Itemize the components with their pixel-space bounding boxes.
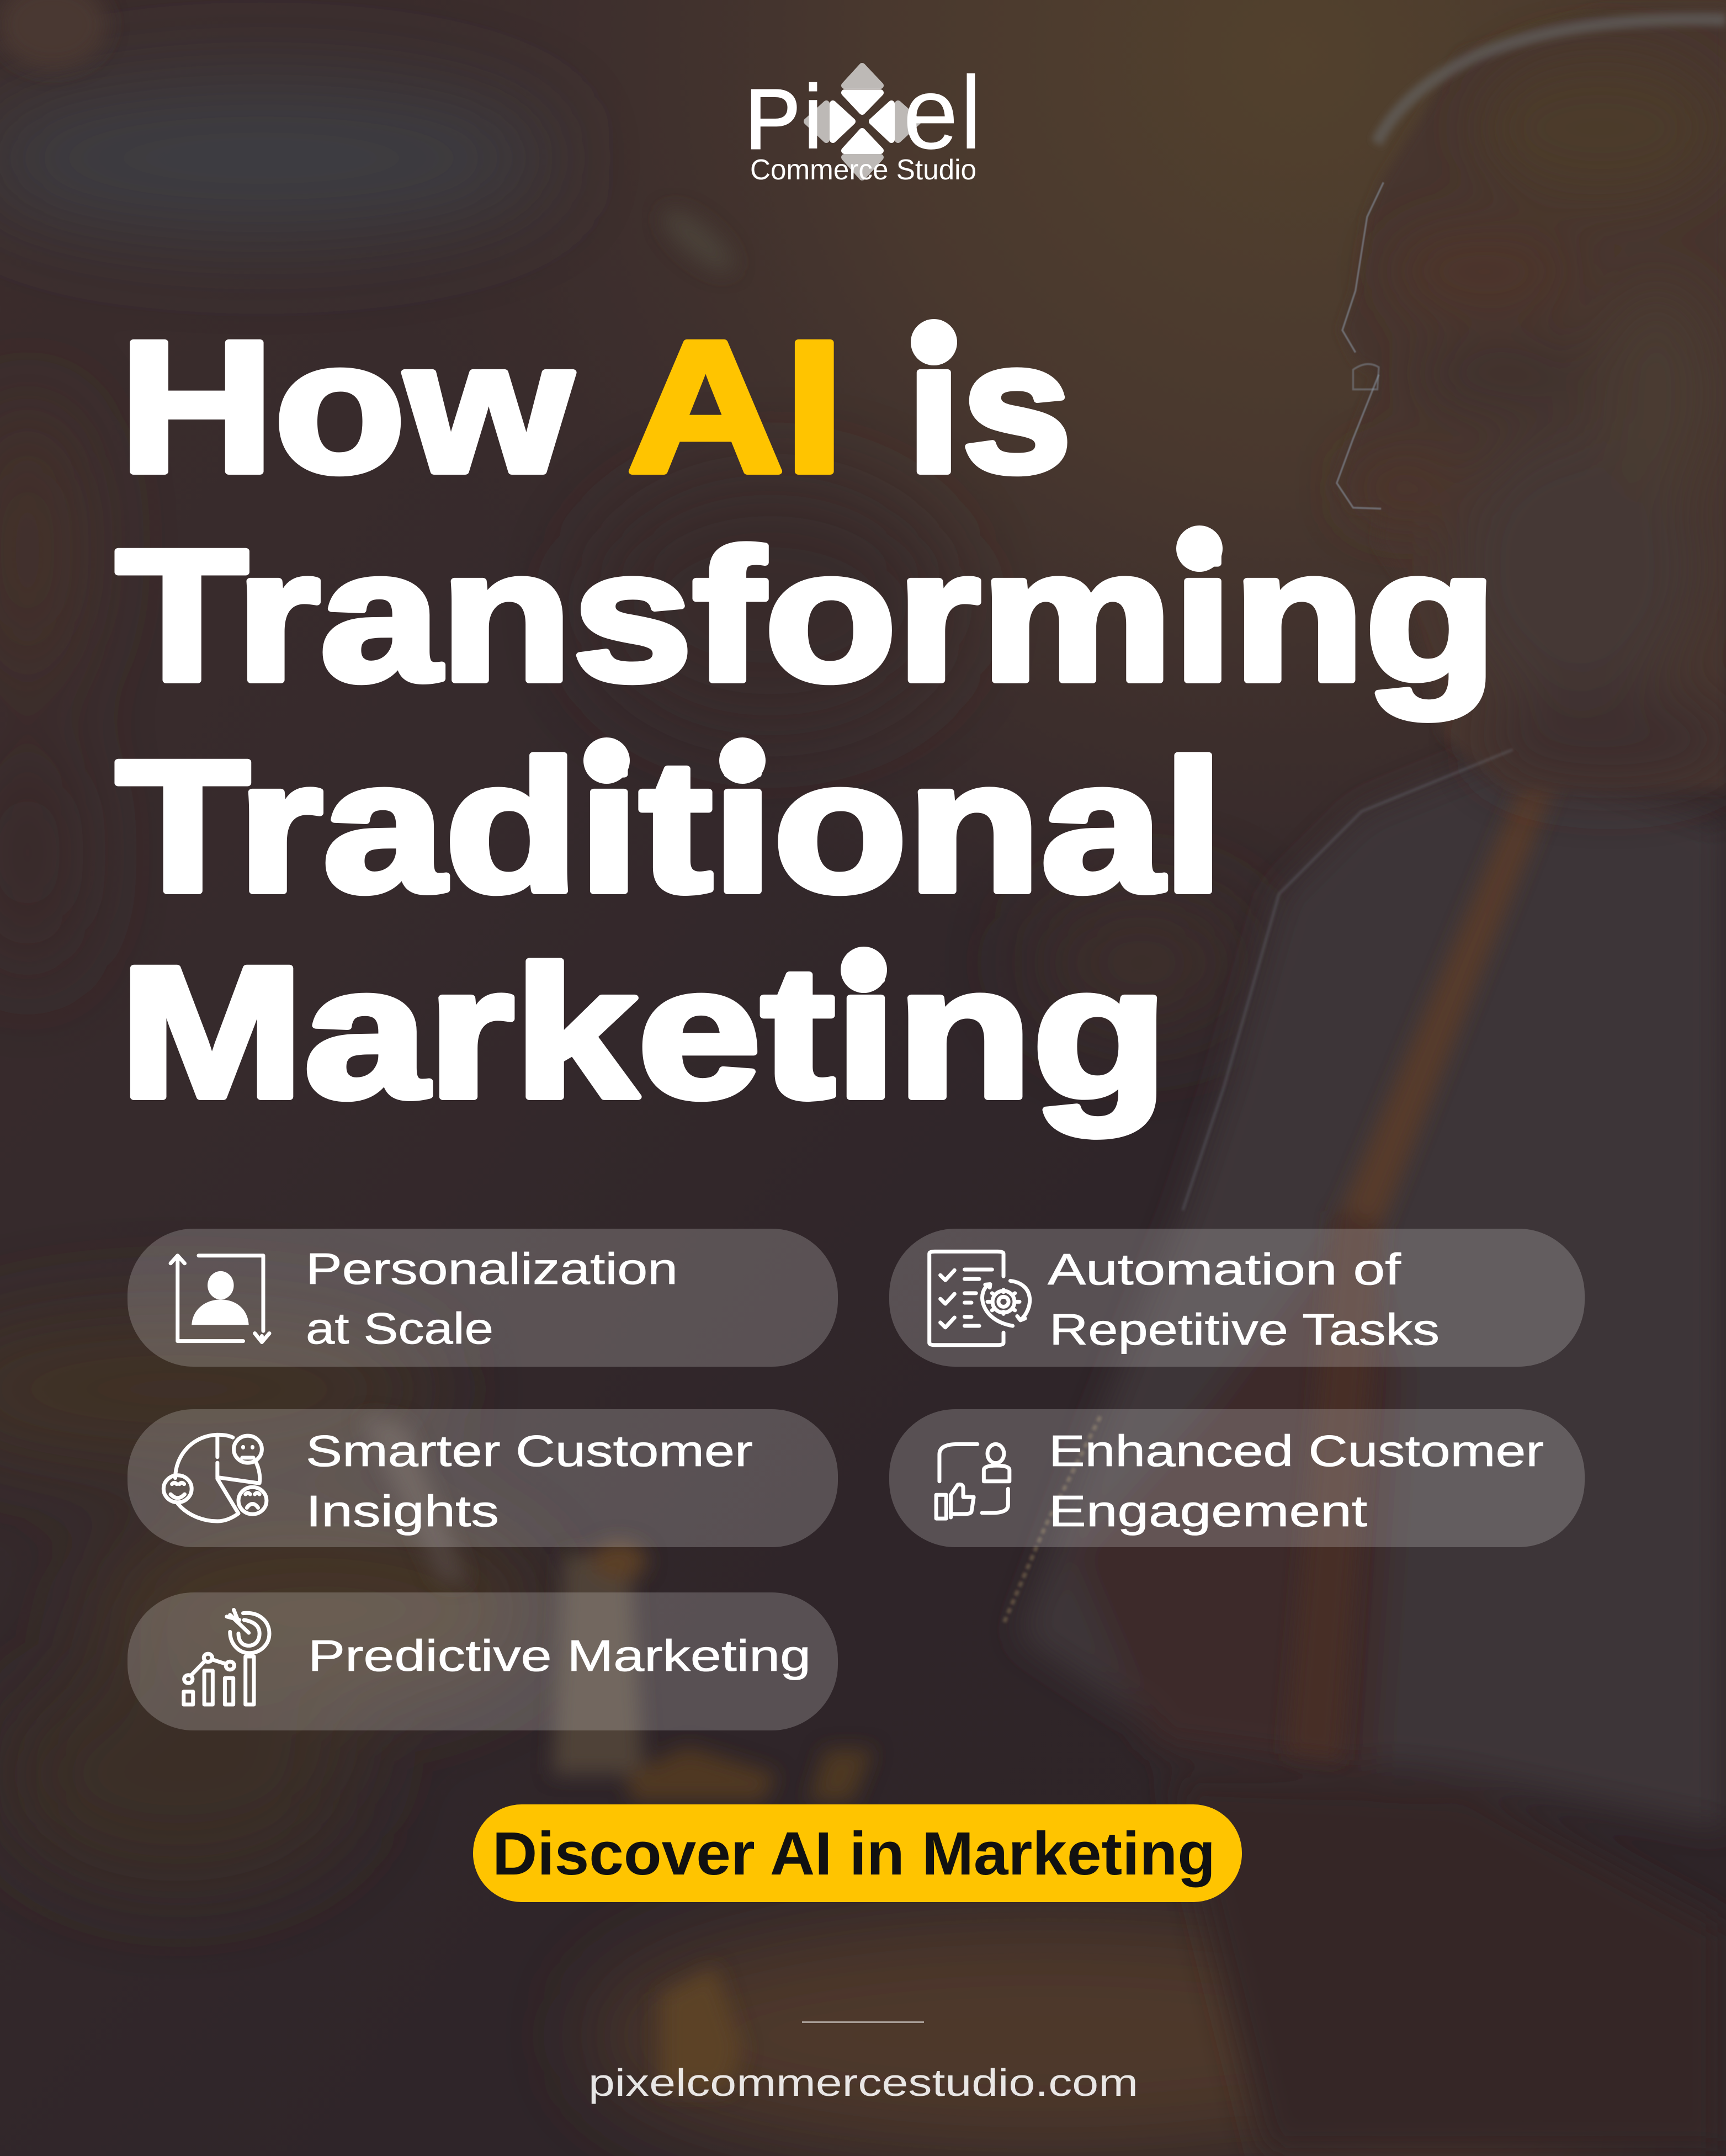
text: personalization: Personalization xyxy=(306,1244,678,1293)
logo wordmark: P xyxy=(745,72,800,167)
text: predictive marketing: Predictive Marketing xyxy=(308,1631,811,1680)
text: automation xyxy=(1048,1245,1440,1354)
footer xyxy=(588,2021,1138,2104)
text: automation: Repetitive Tasks xyxy=(1049,1305,1440,1354)
logo wordmark: i xyxy=(805,66,821,168)
title: is xyxy=(906,302,1072,511)
background: man's head xyxy=(1337,10,1726,789)
logo wordmark xyxy=(745,55,979,186)
text: enhanced customer: Enhanced Customer xyxy=(1049,1426,1544,1475)
call to action button xyxy=(473,1804,1242,1902)
text: personalization xyxy=(306,1244,678,1353)
text: smarter customer: Insights xyxy=(306,1486,499,1536)
panel: automation of repetitive tasks xyxy=(889,1229,1585,1367)
title xyxy=(116,302,1497,1138)
title: How xyxy=(119,302,573,511)
icon: thumbs up and person xyxy=(936,1444,1010,1518)
text: smarter customer: Smarter Customer xyxy=(306,1426,753,1475)
panel: smarter customer insights xyxy=(128,1409,838,1547)
icon: person frame with arrows xyxy=(171,1256,269,1342)
call to action button: Discover AI in Marketing xyxy=(492,1820,1215,1888)
icon: pie chart with faces xyxy=(163,1435,267,1521)
text: personalization: at Scale xyxy=(306,1304,493,1353)
title: Traditional xyxy=(116,721,1224,931)
icon: chart with target xyxy=(184,1610,269,1704)
panel: predictive marketing xyxy=(128,1592,838,1730)
title: Transforming xyxy=(116,511,1497,721)
website url: pixelcommercestudio.com xyxy=(588,2061,1138,2104)
logo mark: diamonds xyxy=(807,66,918,177)
background: shoulder outline xyxy=(1004,750,1513,1623)
title: Marketing xyxy=(119,927,1168,1138)
text: enhanced customer: Engagement xyxy=(1049,1486,1367,1536)
panel: personalization at scale xyxy=(128,1229,838,1367)
text: smarter customer xyxy=(306,1426,753,1536)
text: enhanced customer xyxy=(1049,1426,1544,1536)
logo wordmark: l xyxy=(963,55,979,171)
logo xyxy=(745,55,979,186)
logo wordmark: Commerce Studio xyxy=(750,154,976,186)
text: automation: Automation of xyxy=(1048,1245,1401,1294)
logo wordmark: e xyxy=(903,56,958,171)
title: AI xyxy=(627,302,845,511)
panel: enhanced customer engagement xyxy=(889,1409,1585,1547)
icon: checklist with gear xyxy=(930,1251,1030,1345)
